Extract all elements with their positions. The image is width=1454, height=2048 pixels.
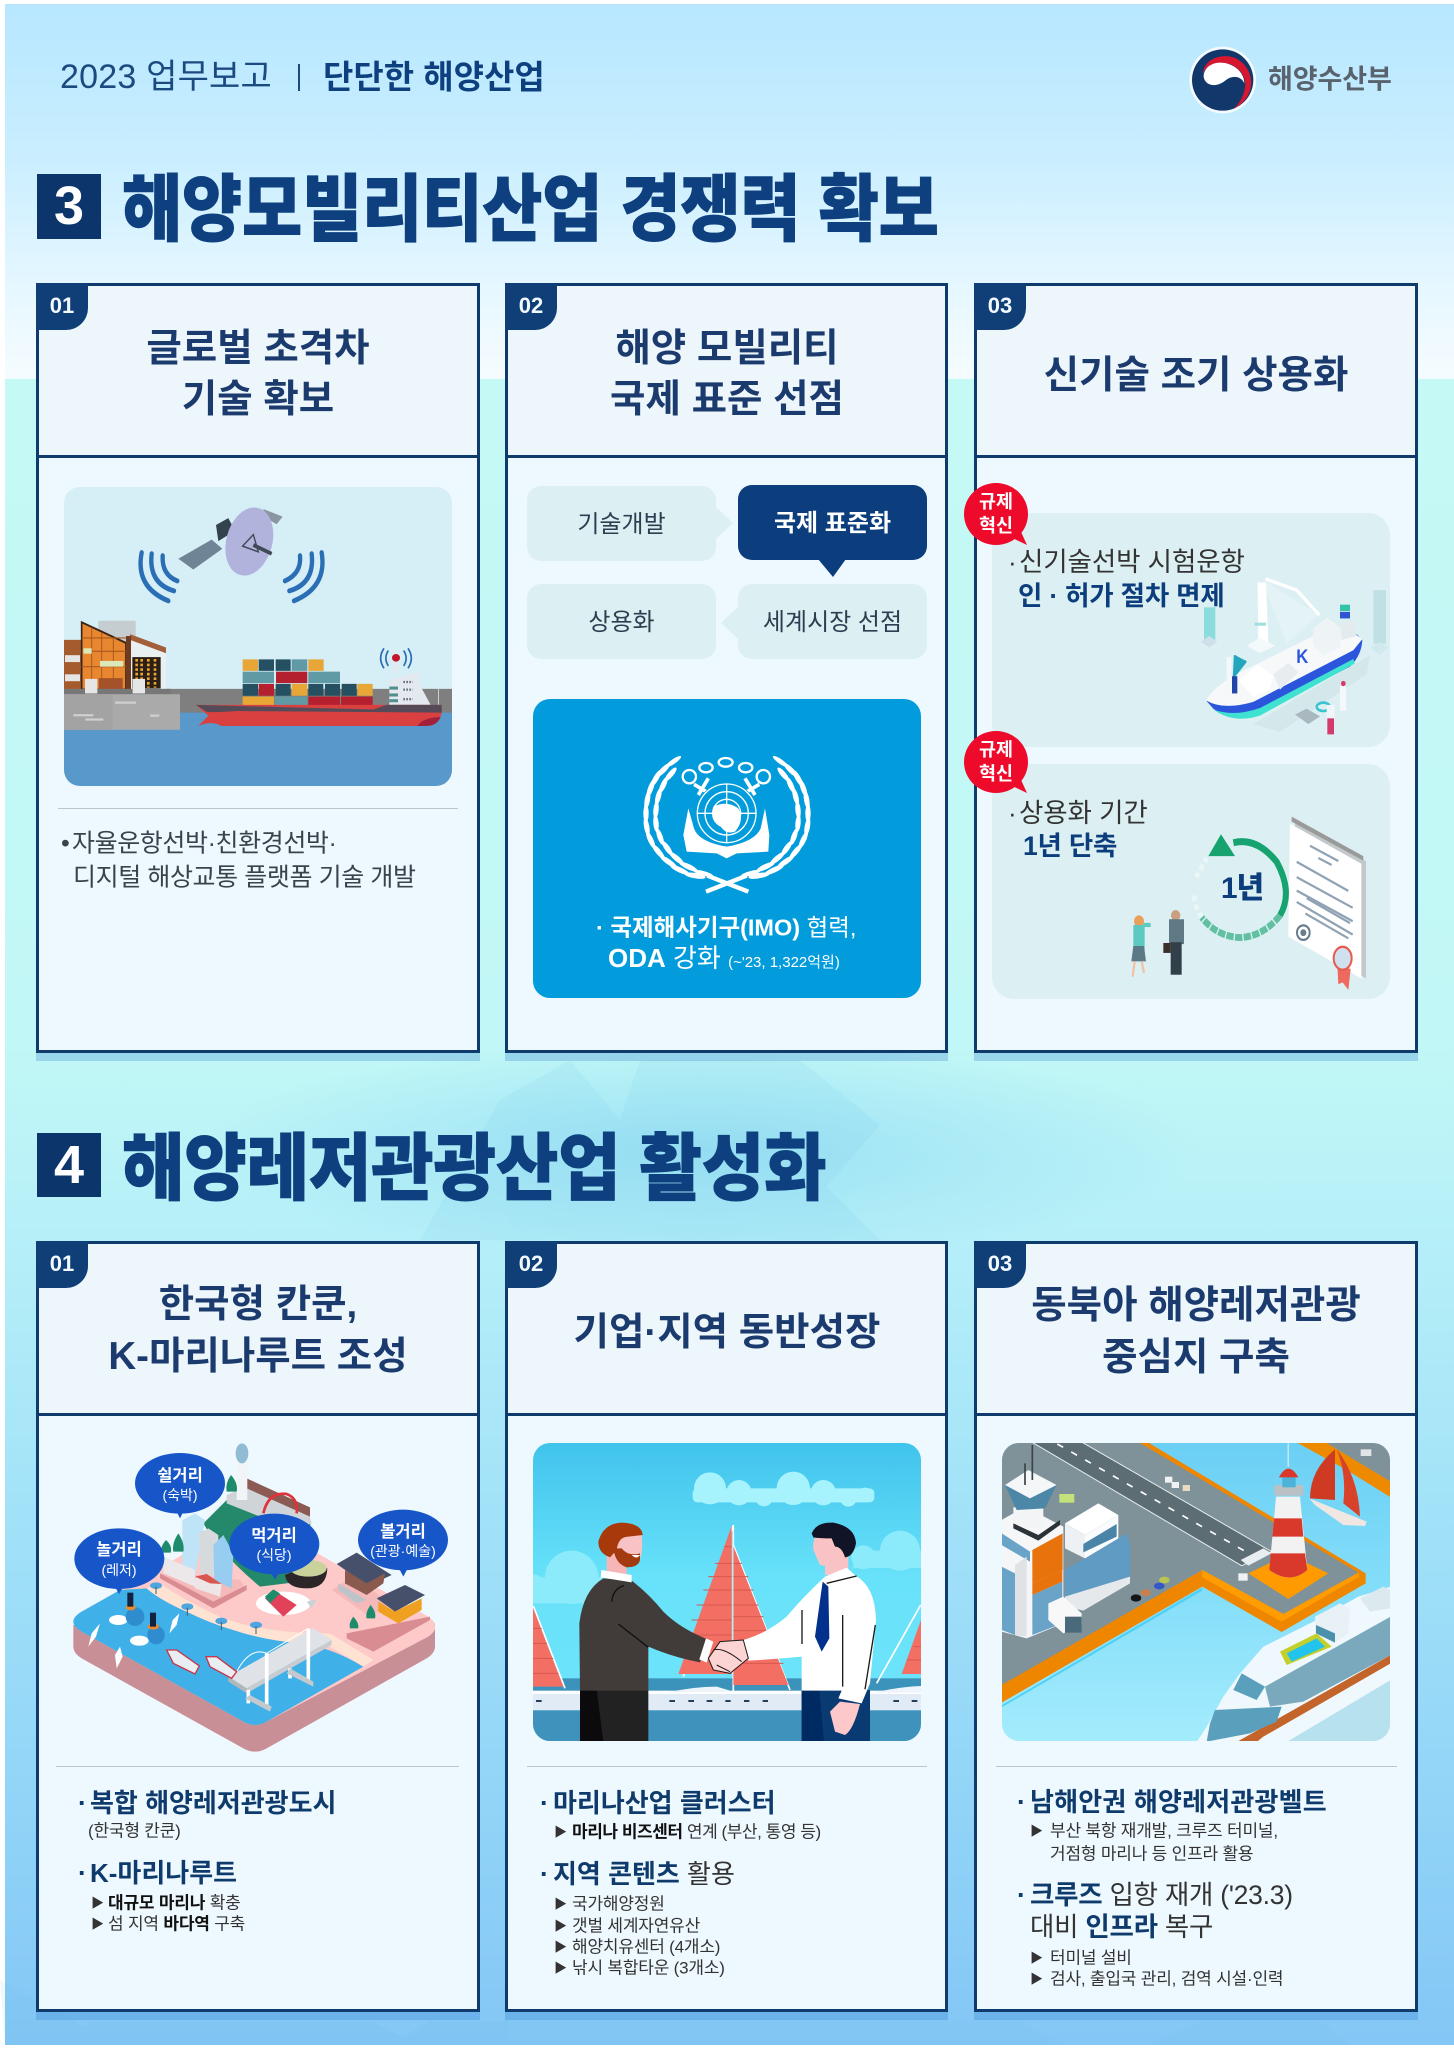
text: shorten period	[1008, 798, 1148, 861]
body text: (한국형 칸쿤)	[88, 1822, 181, 1840]
text: shorten period: ·	[1008, 798, 1017, 828]
number tab 02: 02	[519, 293, 543, 318]
body text	[78, 1788, 336, 1934]
badge: regulatory innovation 1: 규제	[979, 491, 1013, 512]
sea and yachts	[533, 1678, 921, 1693]
section 3 heading: 해양모빌리티산업 경쟁력 확보	[122, 170, 939, 250]
body text	[540, 1788, 821, 1978]
logo: ministry of oceans and fisheries: 해양수산부	[1268, 64, 1392, 94]
IMO text: ODA 강화 (~'23, 1,322억원)	[608, 943, 840, 973]
body text: 크루즈 입항 재개 ('23.3)	[1030, 1880, 1293, 1910]
step: world market: 세계시장 선점	[763, 609, 902, 636]
panel frame	[974, 283, 1418, 1053]
number tab 03: 03	[988, 1251, 1012, 1276]
illustration: handshake with yachts	[533, 1443, 921, 1741]
bubble label: sights: (관광·예술)	[370, 1543, 436, 1559]
panel: 3-02 international standards	[505, 283, 948, 1061]
panel title: 신기술 조기 상용화	[1044, 354, 1348, 397]
body text: 터미널 설비	[1050, 1948, 1132, 1968]
satellite	[178, 499, 283, 584]
panel title: 동북아 해양레저관광	[1031, 1284, 1361, 1327]
body text: 낚시 복합타운 (3개소)	[572, 1958, 725, 1978]
illustration: isometric coastal city	[73, 1443, 448, 1752]
body text: K-마리나루트	[90, 1858, 237, 1888]
header: report label: 2023 업무보고	[60, 58, 272, 96]
logo: ministry of oceans and fisheries	[1189, 46, 1392, 114]
body text: 남해안권 해양레저관광벨트	[1030, 1787, 1327, 1817]
step: commercialization: 상용화	[588, 609, 655, 636]
quay	[1002, 1442, 1366, 1703]
text: trial exemption: ·	[1008, 547, 1017, 577]
sea	[73, 1588, 363, 1725]
body text: •	[61, 830, 70, 858]
divider	[527, 1766, 927, 1767]
body text: 검사, 출입국 관리, 검역 시설·인력	[1050, 1970, 1283, 1988]
bridge	[228, 1628, 332, 1688]
body text: ▶	[91, 1916, 104, 1932]
bubble label: food: 먹거리	[251, 1527, 297, 1545]
IMO text	[596, 914, 856, 973]
body text: ▶	[554, 1940, 567, 1954]
body text: 마리나 비즈센터 연계 (부산, 통영 등)	[572, 1822, 821, 1842]
lighthouse	[1248, 1443, 1328, 1599]
step: commercialization	[527, 584, 716, 659]
divider	[996, 1766, 1397, 1767]
panel: 3-03 new tech commercialization	[964, 283, 1418, 1061]
body text: 거점형 마리나 등 인프라 활용	[1050, 1844, 1253, 1864]
illustration: satellite and container ship	[64, 487, 452, 786]
header: theme: 단단한 해양산업	[323, 58, 545, 96]
panel title: 국제 표준 선점	[610, 378, 844, 421]
body text: ▶	[1030, 1950, 1043, 1966]
illustration: certificate and one year cycle	[1131, 816, 1366, 990]
body text: ▶	[1030, 1972, 1043, 1986]
card: shorten period	[992, 764, 1390, 999]
body text	[1017, 1787, 1327, 1988]
illustration: autonomous ship: K	[1296, 646, 1308, 667]
card: trial exemption	[992, 513, 1390, 747]
bubble label: food: (식당)	[256, 1547, 292, 1563]
clouds	[693, 1472, 874, 1507]
section 3 number: 3	[54, 176, 84, 236]
man left	[579, 1523, 713, 1742]
section 3 number	[37, 174, 101, 239]
body text: ▶	[1030, 1824, 1043, 1838]
body text: ▶	[91, 1896, 104, 1910]
icon: IMO emblem	[643, 756, 811, 894]
people	[1131, 910, 1184, 977]
illustration: isometric seaport	[1002, 1443, 1390, 1741]
number tab 01	[36, 1241, 88, 1288]
badge: regulatory innovation 1: 혁신	[979, 515, 1013, 536]
illustration: autonomous ship	[1201, 577, 1388, 734]
city platform	[160, 1572, 247, 1608]
number tab 03	[974, 1241, 1026, 1288]
panel frame	[505, 283, 948, 1053]
panel title: 글로벌 초격차	[146, 327, 370, 370]
step: tech development: 기술개발	[577, 511, 666, 538]
man right	[743, 1523, 876, 1742]
body text: ▶	[554, 1824, 567, 1840]
island base	[73, 1623, 435, 1752]
panel title: 중심지 구축	[1102, 1336, 1290, 1379]
certificate	[1288, 817, 1366, 990]
number tab 02	[505, 283, 557, 330]
body text: 지역 콘텐츠 활용	[553, 1859, 735, 1889]
panel frame	[974, 1241, 1418, 2012]
bubble label: stay: (숙박)	[162, 1487, 198, 1503]
dock	[64, 694, 180, 730]
body text: 갯벌 세계자연유산	[572, 1916, 700, 1936]
panel title: 한국형 칸쿤,	[159, 1283, 357, 1326]
flow step arrows	[716, 507, 846, 639]
panel title	[108, 1283, 408, 1378]
body text: 대규모 마리나 확충	[108, 1894, 241, 1912]
panel: 3-01 global tech gap	[36, 283, 480, 1061]
panel title	[1031, 1284, 1361, 1379]
text: trial exemption: 인 · 허가 절차 면제	[1018, 581, 1225, 611]
body text: 해양치유센터 (4개소)	[572, 1938, 720, 1956]
body text	[61, 830, 416, 892]
bubble label: stay: 쉴거리	[157, 1467, 203, 1485]
body text: ·	[78, 1858, 87, 1888]
step: world market	[738, 584, 927, 659]
divider	[58, 808, 458, 809]
ship hull	[196, 705, 442, 726]
cycle arrow	[1194, 834, 1286, 938]
body text: 대비 인프라 복구	[1030, 1912, 1213, 1942]
vehicles	[1059, 1449, 1371, 1602]
speech bubbles	[74, 1453, 448, 1594]
body text: 디지털 해상교통 플랫폼 기술 개발	[73, 864, 416, 892]
panel: 4-03 northeast asia hub	[974, 1241, 1418, 2020]
panel frame	[505, 1241, 948, 2012]
text: shorten period: 상용화 기간	[1019, 798, 1148, 828]
port building	[64, 621, 171, 694]
bubble label: stay	[157, 1466, 203, 1503]
panel header band	[508, 286, 945, 458]
text: shorten period: 1년 단축	[1023, 831, 1117, 861]
parasols	[150, 1582, 262, 1628]
panel header band	[977, 1244, 1415, 1416]
body text: ▶	[554, 1918, 567, 1934]
panel: 4-01 K-marina route	[36, 1241, 480, 2020]
panel frame	[36, 1241, 480, 2012]
number tab 01: 01	[50, 1251, 74, 1276]
step: tech development	[527, 486, 716, 561]
section 4 heading: 해양레저관광산업 활성화	[122, 1128, 826, 1210]
panel header band	[39, 286, 477, 458]
panel header band	[508, 1244, 945, 1416]
IMO text: · 국제해사기구(IMO) 협력,	[596, 914, 856, 940]
runway	[1032, 1442, 1272, 1566]
body text: 섬 지역 바다역 구축	[108, 1914, 245, 1934]
step: international standardization	[738, 485, 927, 560]
containers	[243, 659, 373, 709]
panel title	[146, 327, 370, 421]
section 4 number	[37, 1133, 101, 1197]
terminal building	[1002, 1445, 1130, 1638]
body text: ▶	[554, 1896, 567, 1912]
text: trial exemption	[1008, 547, 1245, 611]
body text: ·	[540, 1859, 549, 1889]
ship superstructure	[381, 648, 439, 705]
panel title: K-마리나루트 조성	[108, 1335, 408, 1378]
step: international standardization: 국제 표준화	[774, 510, 891, 537]
bubble label: leisure	[96, 1540, 142, 1578]
body text: 부산 북항 재개발, 크루즈 터미널,	[1050, 1822, 1278, 1840]
header divider	[298, 64, 300, 91]
top-right pier	[1325, 1442, 1392, 1483]
boats, surfers and gulls	[167, 1650, 199, 1674]
panel title: 기술 확보	[182, 378, 334, 421]
sailboat	[1309, 1449, 1367, 1526]
bubble label: sights: 볼거리	[380, 1523, 426, 1541]
number tab 03: 03	[988, 293, 1012, 318]
1 year label: 1년	[1221, 872, 1263, 905]
signal waves	[141, 553, 322, 601]
panel title	[610, 327, 844, 421]
bubble label: food	[251, 1526, 297, 1563]
traditional buildings	[337, 1553, 392, 1586]
panel title: 해양 모빌리티	[615, 327, 839, 370]
text: trial exemption: 신기술선박 시험운항	[1019, 547, 1245, 577]
number tab 02	[505, 1241, 557, 1288]
body text: ▶	[554, 1960, 567, 1976]
food bowl and fish plate	[285, 1563, 327, 1588]
number tab 01	[36, 283, 88, 330]
badge: regulatory innovation 2	[964, 731, 1028, 793]
body text: 마리나산업 클러스터	[553, 1788, 776, 1818]
green hill and buildings	[203, 1493, 313, 1587]
body text: 복합 해양레저관광도시	[90, 1788, 336, 1818]
badge: regulatory innovation 1	[964, 483, 1028, 545]
handshake	[708, 1640, 748, 1673]
body text: ·	[78, 1788, 87, 1818]
divider	[56, 1766, 459, 1767]
cruise ship	[1197, 1587, 1391, 1742]
bubble label: leisure: (레저)	[101, 1562, 137, 1578]
bubble label: sights	[370, 1522, 436, 1559]
panel: 4-02 corporate and regional growth	[505, 1241, 948, 2020]
body text: ·	[1017, 1787, 1026, 1817]
panel title: 기업·지역 동반성장	[574, 1311, 880, 1354]
bubble label: leisure: 놀거리	[96, 1541, 142, 1559]
body text: ·	[540, 1788, 549, 1818]
body text: 국가해양정원	[572, 1894, 665, 1914]
panel header band	[39, 1244, 477, 1416]
number tab 01: 01	[50, 293, 74, 318]
body text: ·	[1017, 1880, 1026, 1910]
section 4 number: 4	[54, 1135, 84, 1195]
number tab 03	[974, 283, 1026, 330]
panel header band	[977, 286, 1415, 458]
badge: regulatory innovation 2: 규제	[979, 739, 1013, 760]
panel frame	[36, 283, 480, 1053]
body text: 자율운항선박·친환경선박·	[72, 830, 336, 858]
IMO card	[533, 699, 921, 998]
badge: regulatory innovation 2: 혁신	[979, 763, 1013, 784]
number tab 02: 02	[519, 1251, 543, 1276]
